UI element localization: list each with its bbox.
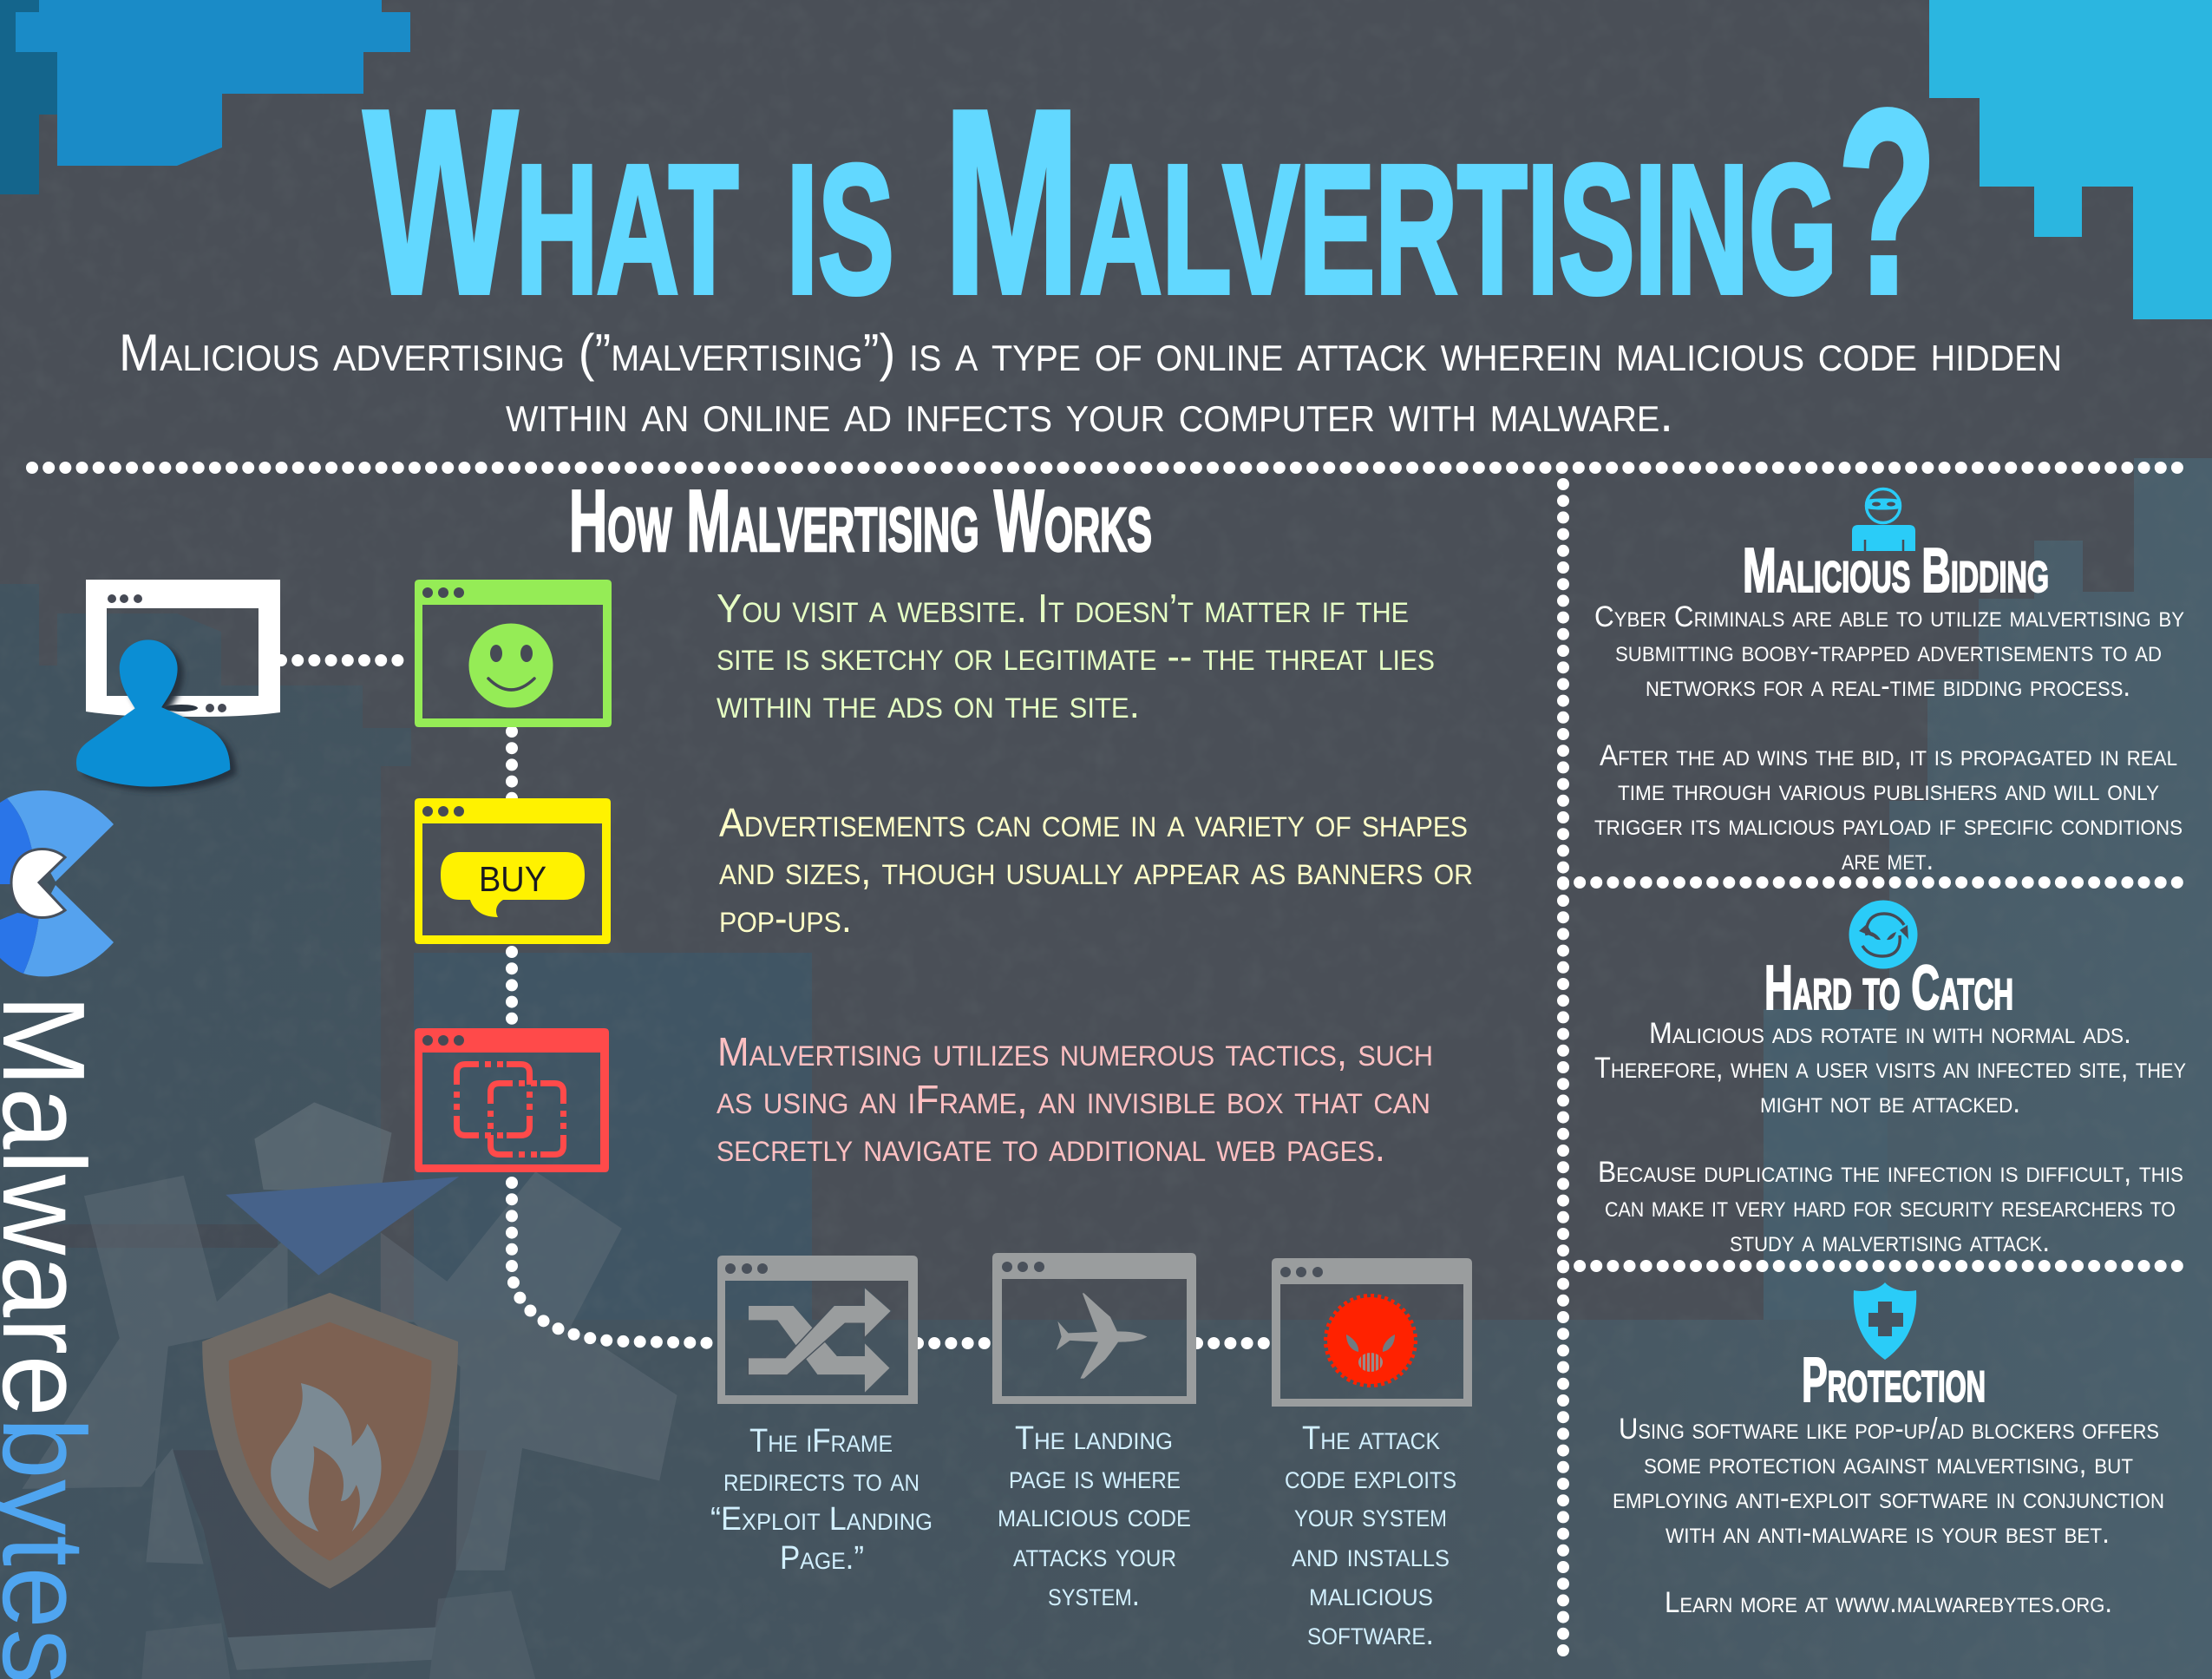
caption: attack code: The attack bbox=[1302, 1420, 1440, 1457]
heading: protection: Protection bbox=[1802, 1346, 1986, 1415]
step 2 text: and sizes, though usually appear as banners or bbox=[719, 848, 1473, 893]
caption: landing page: page is where bbox=[1009, 1459, 1181, 1496]
text: protection: with an anti-malware is your best bet. bbox=[1666, 1517, 2110, 1550]
faded shield emblem in background bbox=[23, 1102, 677, 1679]
icon: rotating evil face bbox=[1849, 901, 1917, 968]
step 3 text bbox=[717, 1029, 1433, 1170]
connector dots: user to first window bbox=[281, 660, 1268, 1343]
text: malicious bidding: After the ad wins the bid, it is propagated in real bbox=[1600, 739, 2177, 772]
step 1 text bbox=[717, 586, 1435, 726]
intro text: within an online ad infects your computer with malware. bbox=[506, 384, 1673, 443]
icon: hacker bbox=[1852, 489, 1915, 551]
text: hard to catch: might not be attacked. bbox=[1760, 1086, 2020, 1119]
caption: iframe bbox=[710, 1423, 933, 1577]
step 1 text: within the ads on the site. bbox=[717, 681, 1140, 726]
text: hard to catch: Malicious ads rotate in with normal ads. bbox=[1649, 1017, 2131, 1050]
text: malicious bidding: time through various publishers and will only bbox=[1618, 774, 2159, 807]
intro text bbox=[119, 324, 2062, 443]
window: yellow buy ad bbox=[415, 798, 611, 944]
text: malicious bidding: are met. bbox=[1842, 843, 1934, 876]
caption: iframe: “Exploit Landing bbox=[710, 1501, 933, 1538]
text: malicious bidding: trigger its malicious payload if specific conditions bbox=[1594, 809, 2183, 842]
dotted dividers bbox=[32, 468, 2181, 1653]
step 3 text: as using an iFrame, an invisible box that can bbox=[717, 1077, 1430, 1122]
caption: attack code bbox=[1285, 1420, 1456, 1652]
caption: attack code: malicious bbox=[1309, 1577, 1433, 1613]
text: malicious bidding: submitting booby-trapped advertisements to ad bbox=[1615, 635, 2162, 668]
caption: attack code: and installs bbox=[1292, 1538, 1450, 1574]
caption: iframe: The iFrame bbox=[749, 1423, 893, 1459]
heading: how malvertising works: How Malvertising Works bbox=[569, 473, 1152, 570]
window: yellow buy ad: BUY bbox=[479, 859, 546, 899]
text: malicious bidding: networks for a real-time bidding process. bbox=[1646, 670, 2130, 703]
text: protection bbox=[1613, 1413, 2164, 1619]
step 3 text: secretly navigate to additional web pages. bbox=[717, 1125, 1385, 1170]
step 1 text: site is sketchy or legitimate -- the threat lies bbox=[717, 633, 1435, 679]
caption: landing page bbox=[998, 1420, 1191, 1613]
caption: landing page: system. bbox=[1048, 1577, 1140, 1613]
text: malicious bidding bbox=[1594, 600, 2184, 876]
icon: user at monitor bbox=[76, 580, 280, 791]
text: hard to catch: study a malvertising attack. bbox=[1730, 1225, 2050, 1258]
text: protection: employing anti-exploit software in conjunction bbox=[1613, 1482, 2164, 1515]
step 1 text: You visit a website. It doesn’t matter if the bbox=[717, 586, 1409, 631]
step 2 text: Advertisements can come in a variety of shapes bbox=[719, 800, 1468, 845]
caption: iframe: Page.” bbox=[780, 1540, 864, 1577]
step 3 text: Malvertising utilizes numerous tactics, such bbox=[717, 1029, 1433, 1074]
window: attack monster bbox=[1272, 1258, 1472, 1407]
corner block: top left bbox=[0, 0, 410, 194]
caption: attack code: code exploits bbox=[1285, 1459, 1456, 1496]
Malwarebytes logo icon bbox=[0, 790, 114, 976]
caption: landing page: attacks your bbox=[1013, 1538, 1176, 1574]
heading: malicious bidding: Malicious Bidding bbox=[1743, 536, 2049, 606]
step 2 text: pop-ups. bbox=[719, 895, 852, 941]
window: landing page plane bbox=[992, 1253, 1196, 1404]
window: redirect shuffle bbox=[717, 1256, 918, 1404]
icon: shield with cross bbox=[1854, 1282, 1916, 1360]
text: hard to catch bbox=[1594, 1017, 2186, 1258]
intro text: Malicious advertising (”malvertising”) is a type of online attack wherein malicious code hidden bbox=[119, 324, 2062, 382]
text: protection: some protection against malvertising, but bbox=[1644, 1447, 2133, 1480]
text: protection: Learn more at www.malwarebytes.org. bbox=[1665, 1586, 2112, 1619]
corner block: top right bbox=[1929, 0, 2212, 319]
caption: attack code: software. bbox=[1307, 1616, 1434, 1652]
caption: landing page: The landing bbox=[1015, 1420, 1173, 1457]
window: red iframe bbox=[415, 1028, 609, 1172]
caption: iframe: redirects to an bbox=[723, 1462, 919, 1499]
caption: landing page: malicious code bbox=[998, 1498, 1191, 1534]
text: protection: Using software like pop-up/ad blockers offers bbox=[1619, 1413, 2159, 1446]
step 2 text bbox=[719, 800, 1473, 941]
window: green smiley bbox=[415, 580, 612, 727]
caption: attack code: your system bbox=[1294, 1498, 1447, 1534]
heading: hard to catch: Hard to Catch bbox=[1764, 954, 2013, 1023]
text: hard to catch: Because duplicating the infection is difficult, this bbox=[1598, 1156, 2183, 1189]
